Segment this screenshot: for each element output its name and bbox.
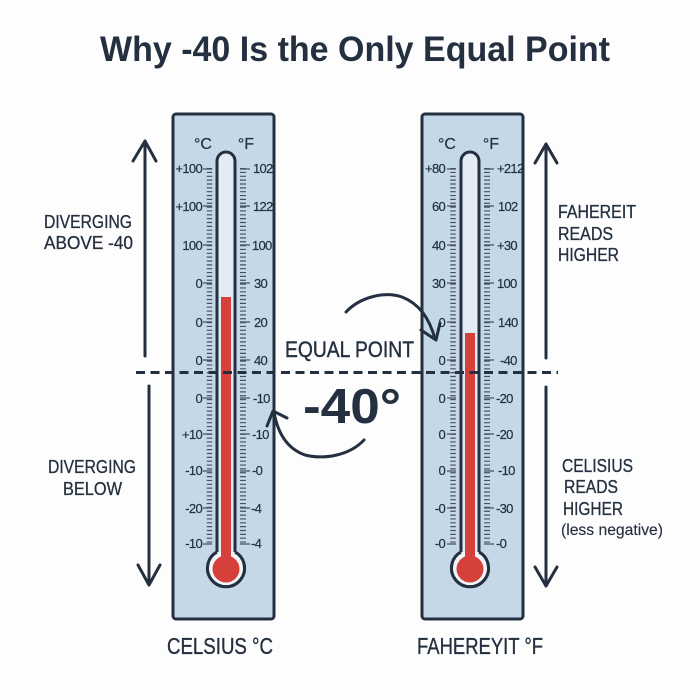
Celsius thermometer left scale labels: 0	[195, 391, 202, 406]
Fahrenheit thermometer right scale labels: -10	[498, 463, 515, 478]
Celsius thermometer left scale labels: 0	[195, 276, 202, 291]
Celsius thermometer right scale labels: -10	[253, 391, 270, 406]
Celsius thermometer right scale labels: -0	[252, 463, 263, 478]
Fahrenheit thermometer right scale labels: -40	[500, 353, 517, 368]
Celsius thermometer left scale labels: -10	[185, 463, 202, 478]
Celsius thermometer unit headers: °F	[238, 136, 254, 153]
Celsius thermometer left scale labels: 100	[182, 238, 202, 253]
label: diverging above: DIVERGING	[44, 212, 132, 232]
Celsius thermometer right scale labels: 30	[254, 276, 268, 291]
Fahrenheit thermometer right scale labels: 140	[498, 315, 518, 330]
Fahrenheit thermometer right scale labels: -30	[496, 501, 513, 516]
label: diverging above: ABOVE -40	[44, 233, 133, 253]
Fahrenheit thermometer left scale labels: -0	[435, 536, 445, 551]
Fahrenheit thermometer unit headers: °F	[483, 136, 499, 153]
Fahrenheit thermometer right scale labels: 102	[498, 199, 518, 214]
label: Fahrenheit reads higher: HIGHER	[558, 245, 619, 265]
Celsius thermometer left scale labels: 0	[195, 353, 202, 368]
Celsius thermometer left scale labels	[176, 161, 202, 551]
arrow: diverging below left	[138, 386, 160, 585]
Celsius thermometer unit headers	[194, 136, 254, 153]
Fahrenheit thermometer right scale labels: +30	[497, 238, 517, 253]
Celsius thermometer unit headers: °C	[194, 136, 212, 153]
Fahrenheit thermometer left scale labels: 0	[438, 463, 445, 478]
Fahrenheit thermometer left scale labels: 40	[432, 238, 445, 253]
Fahrenheit thermometer left scale labels	[425, 161, 445, 551]
Celsius thermometer left scale labels: -10	[185, 536, 202, 551]
label: Celsius reads higher: CELISIUS	[562, 456, 633, 476]
Fahrenheit thermometer right scale labels: -20	[496, 391, 513, 406]
label: -40 degrees: -40°	[303, 380, 401, 434]
label: Celsius axis: CELSIUS °C	[167, 633, 273, 659]
Celsius thermometer red mercury	[212, 297, 240, 582]
label: Fahrenheit reads higher: READS	[558, 224, 613, 244]
Fahrenheit thermometer unit headers	[438, 136, 499, 153]
label: diverging below: BELOW	[63, 479, 122, 499]
Fahrenheit thermometer left scale labels: -0	[435, 501, 445, 516]
Celsius thermometer right scale labels: 100	[252, 238, 272, 253]
Celsius thermometer right scale labels: -4	[251, 501, 262, 516]
label: diverging above	[44, 212, 133, 253]
Fahrenheit thermometer left scale labels: 0	[438, 353, 445, 368]
Fahrenheit thermometer right scale labels: 100	[497, 276, 517, 291]
Celsius thermometer right scale labels: -10	[252, 427, 269, 442]
Fahrenheit thermometer left scale labels: 60	[432, 199, 445, 214]
arrow: diverging above left	[133, 141, 156, 356]
Fahrenheit thermometer left scale labels: 0	[438, 391, 445, 406]
arrow: curved into Fahrenheit thermometer	[346, 295, 440, 340]
Celsius thermometer left scale labels: 0	[195, 315, 202, 330]
panel: Fahrenheit thermometer	[422, 114, 524, 619]
equal point dashed line	[136, 371, 558, 374]
Fahrenheit thermometer left scale labels: 0	[438, 427, 445, 442]
Fahrenheit thermometer left scale labels: +80	[425, 161, 445, 176]
Celsius thermometer right scale labels: 122	[253, 199, 273, 214]
Celsius thermometer left scale labels: +100	[176, 199, 202, 214]
Celsius thermometer tube and bulb	[208, 152, 245, 587]
Celsius thermometer right scale labels: -4	[251, 536, 262, 551]
label: diverging below: DIVERGING	[48, 457, 136, 477]
label: Fahrenheit axis: FAHEREYIT °F	[417, 633, 543, 659]
Fahrenheit thermometer right scale labels	[496, 161, 524, 551]
Celsius thermometer right scale labels: 20	[254, 315, 268, 330]
title: Why -40 Is the Only Equal Point	[100, 30, 610, 69]
Celsius thermometer left scale labels: -20	[185, 501, 202, 516]
Fahrenheit thermometer tube and bulb	[452, 152, 489, 587]
label: Celsius reads higher: HIGHER	[563, 499, 623, 519]
Fahrenheit thermometer right scale labels: -20	[496, 427, 513, 442]
Celsius thermometer left scale labels: +10	[182, 427, 202, 442]
label: diverging below	[48, 457, 136, 499]
Fahrenheit thermometer red mercury	[456, 333, 484, 582]
arrow: Celsius reads higher	[535, 387, 557, 586]
Fahrenheit thermometer right scale labels: -0	[496, 536, 507, 551]
label: Celsius reads higher	[561, 456, 663, 539]
panel: Celsius thermometer	[173, 114, 274, 619]
Fahrenheit thermometer left scale labels: 0	[438, 315, 445, 330]
Fahrenheit thermometer left scale labels: 30	[432, 276, 445, 291]
label: Celsius reads higher: READS	[564, 477, 618, 497]
Fahrenheit thermometer unit headers: °C	[438, 136, 456, 153]
Celsius thermometer right scale labels: 102	[253, 161, 273, 176]
label: Fahrenheit reads higher: FAHEREIT	[558, 202, 636, 222]
Fahrenheit thermometer tick marks	[447, 168, 494, 545]
label: Fahrenheit reads higher	[558, 202, 636, 265]
Celsius thermometer left scale labels: +100	[176, 161, 202, 176]
arrow: Fahrenheit reads higher	[535, 144, 557, 358]
Celsius thermometer tick marks	[203, 168, 250, 545]
Celsius thermometer right scale labels	[251, 161, 273, 551]
label: Celsius reads higher: (less negative)	[561, 522, 663, 539]
Celsius thermometer right scale labels: 40	[254, 353, 268, 368]
Fahrenheit thermometer right scale labels: +212	[497, 161, 524, 176]
arrow: curved into Celsius thermometer	[267, 411, 364, 457]
label: equal point: EQUAL POINT	[285, 337, 414, 362]
